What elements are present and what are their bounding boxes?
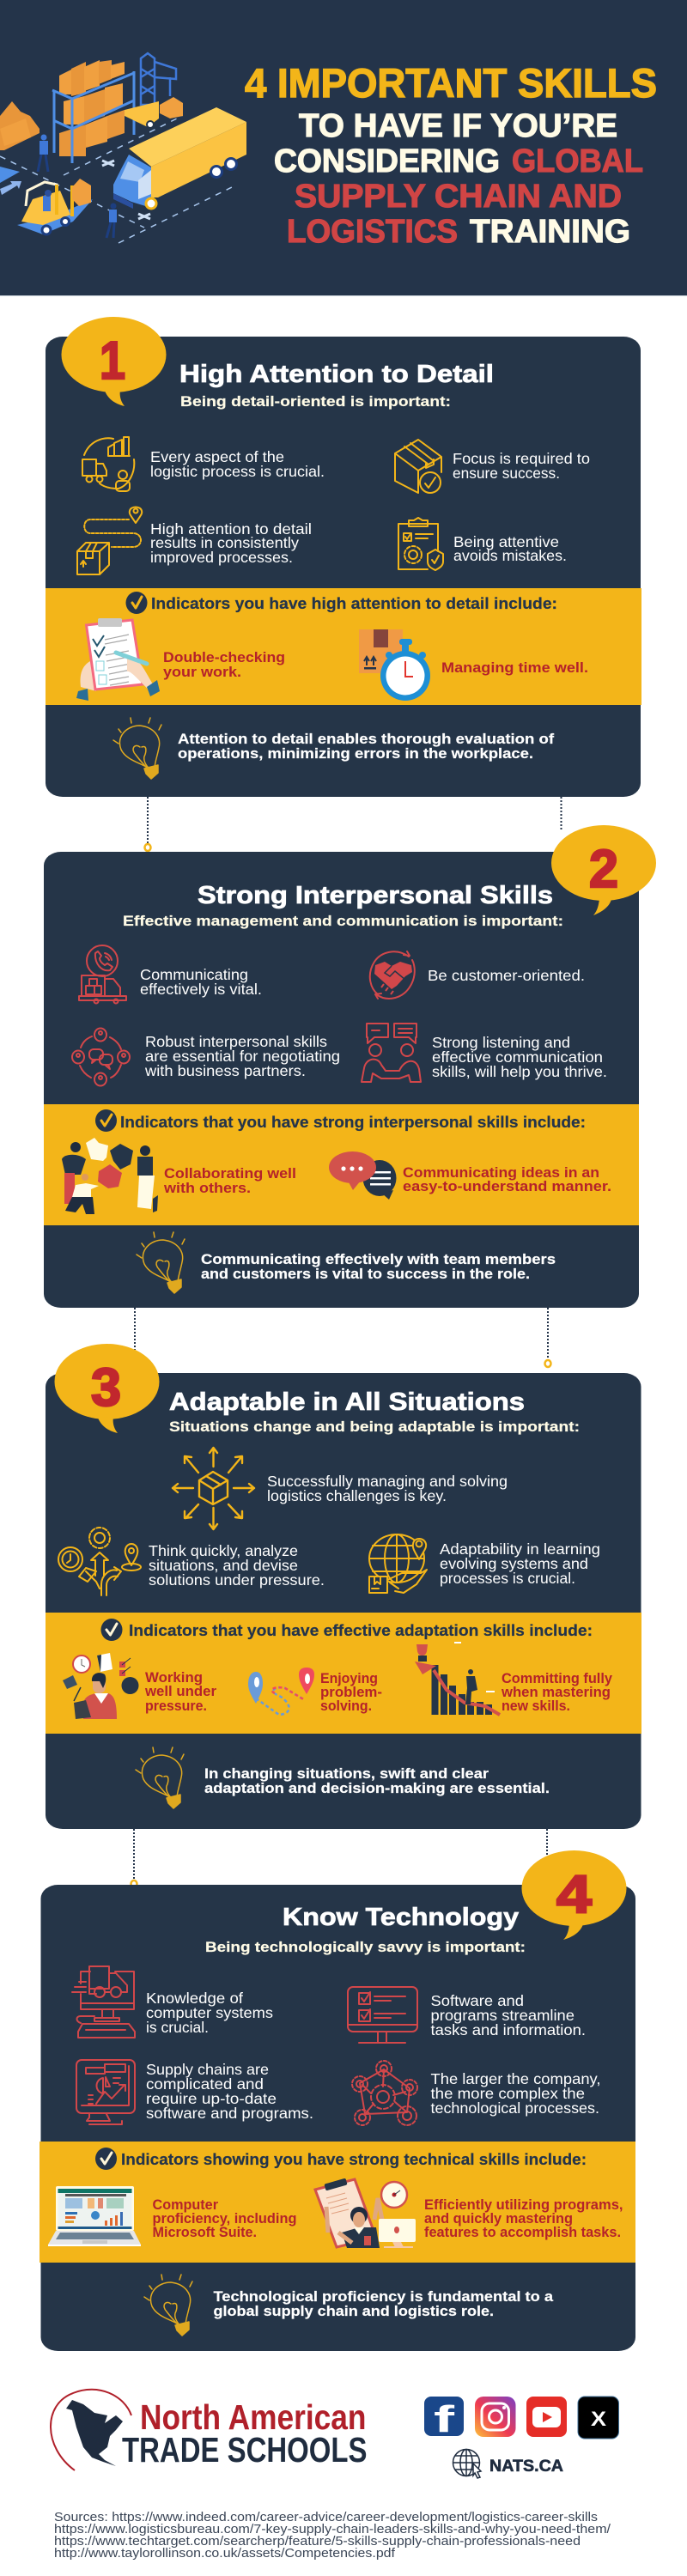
text: communicating xyxy=(140,966,262,998)
title xyxy=(245,60,657,250)
icon: phone and truck xyxy=(79,945,126,1003)
sources: Sources: https://www.indeed.com/career-advice/career-development/logistics-career-skills xyxy=(54,2511,598,2524)
illustration: team with puzzle pieces xyxy=(62,1138,158,1214)
text: high attention: High attention to detail xyxy=(150,520,312,538)
text: double checking: Double-checking xyxy=(163,649,285,665)
title: LOGISTICS xyxy=(287,214,458,250)
text: every aspect xyxy=(150,448,325,480)
text: collaborating: with others. xyxy=(163,1180,251,1196)
text: managing time: Managing time well. xyxy=(441,659,588,676)
connector dotted lines 2 to 3 xyxy=(135,1308,551,1367)
truck xyxy=(113,107,246,209)
icon: handshake xyxy=(370,951,415,999)
indicators band 4 xyxy=(40,2142,635,2263)
heading: Adaptable in All Situations xyxy=(169,1388,525,1416)
text: successfully managing: Successfully managing and solving xyxy=(267,1473,508,1490)
text: communicating ideas: easy-to-understand manner. xyxy=(403,1178,611,1194)
left pallet boxes xyxy=(0,101,40,150)
text: working well xyxy=(144,1669,216,1714)
icon: people network xyxy=(72,1029,130,1085)
title: TO HAVE IF YOU’RE xyxy=(299,108,617,144)
text: computer proficiency xyxy=(153,2196,297,2240)
panel: skill 1 high attention to detail xyxy=(46,317,641,797)
text: every aspect: Every aspect of the xyxy=(150,448,284,465)
number bubble 4: 4 xyxy=(556,1865,593,1924)
icon: speech bubbles xyxy=(329,1151,397,1200)
illustration: person working under pressure xyxy=(63,1653,139,1719)
sources: http://www.taylorollinson.co.uk/assets/Competencies.pdf xyxy=(54,2547,396,2561)
sources xyxy=(54,2511,611,2561)
callout text xyxy=(178,732,555,762)
callout text xyxy=(213,2289,554,2319)
text: robust: with business partners. xyxy=(144,1062,306,1079)
text: being attentive xyxy=(453,533,567,564)
callout text: adaptation and decision-making are essential. xyxy=(204,1781,550,1796)
indicators heading: Indicators you have high attention to detail include: xyxy=(151,595,557,612)
text: strong listening xyxy=(432,1034,607,1080)
callout text xyxy=(201,1252,556,1282)
text: working well: Working xyxy=(145,1669,203,1686)
illustration: warehouse and truck xyxy=(0,53,246,243)
header banner xyxy=(0,0,687,296)
illustration: clipboard in hands xyxy=(76,618,160,701)
callout text: and customers is vital to success in the role. xyxy=(201,1267,530,1282)
indicators heading: Indicators that you have effective adaptation skills include: xyxy=(129,1622,593,1639)
icon: check badge xyxy=(125,592,148,614)
icon: youtube xyxy=(526,2397,567,2437)
indicators heading: Indicators showing you have strong technical skills include: xyxy=(121,2151,587,2168)
text: successfully managing: logistics challenges is key. xyxy=(267,1487,447,1504)
text: high attention xyxy=(150,520,312,566)
illustration: stairs and trophy xyxy=(415,1642,500,1715)
number bubble 4 xyxy=(522,1850,627,1940)
text: enjoying: Enjoying xyxy=(320,1670,378,1686)
icon: route with pin and box xyxy=(77,507,142,574)
text: customer oriented: Be customer-oriented. xyxy=(428,967,585,984)
icon: check badge xyxy=(101,1619,122,1641)
panel: skill 3 adaptable xyxy=(46,1344,641,1829)
logo: north american trade schools xyxy=(51,2390,368,2470)
callout text: Technological proficiency is fundamental to a xyxy=(213,2289,554,2305)
number bubble 2: 2 xyxy=(589,840,618,899)
illustration: laptop with spreadsheet xyxy=(48,2186,141,2246)
icon: two people with speech bubbles xyxy=(362,1024,421,1082)
connector dotted lines 3 to 4 xyxy=(131,1829,547,1887)
text: committing: Committing fully xyxy=(502,1670,613,1686)
number bubble 3: 3 xyxy=(91,1358,121,1418)
front forklift xyxy=(17,179,93,234)
text: software: tasks and information. xyxy=(431,2021,586,2038)
illustration: map pins route xyxy=(248,1668,314,1715)
text: knowledge: Knowledge of xyxy=(146,1990,243,2007)
shelving boxes xyxy=(52,60,134,163)
panel: skill 4 know technology xyxy=(40,1850,635,2351)
logo: north american trade schools: TRADE SCHOOLS xyxy=(122,2430,368,2470)
icon: logistics process cycle xyxy=(82,437,134,491)
number bubble 2 xyxy=(551,825,656,915)
icon: network of gears xyxy=(352,2061,417,2125)
text: focus: ensure success. xyxy=(453,465,560,482)
text: enjoying xyxy=(320,1670,382,1714)
sources: https://www.logisticsbureau.com/7-key-supply-chain-leaders-skills-and-why-you-need-them/ xyxy=(54,2523,611,2537)
text: think quickly xyxy=(149,1542,325,1589)
icon: monitor with charts xyxy=(76,2060,135,2124)
subheading: Being technologically savvy is important: xyxy=(205,1939,526,1955)
icon: x: X xyxy=(591,2408,606,2431)
text: robust: are essential for negotiating xyxy=(145,1048,340,1065)
text: supply chains: Supply chains are xyxy=(146,2061,269,2078)
icon: facebook: f xyxy=(434,2398,455,2440)
title: TRAINING xyxy=(470,214,630,250)
callout text: operations, minimizing errors in the workplace. xyxy=(178,746,533,762)
title: GLOBAL xyxy=(512,143,643,179)
icon: check badge xyxy=(95,1109,117,1132)
callout text xyxy=(204,1766,550,1796)
text: successfully managing xyxy=(267,1473,508,1504)
icon: box with check xyxy=(395,440,441,493)
icon: instagram xyxy=(475,2397,515,2437)
yellow forklift rear xyxy=(125,97,183,128)
text: high attention: improved processes. xyxy=(150,549,293,566)
callout text: Attention to detail enables thorough evaluation of xyxy=(178,732,555,747)
text: being attentive: Being attentive xyxy=(453,533,559,550)
title: CONSIDERING xyxy=(274,143,500,179)
subheading: Effective management and communication is important: xyxy=(123,913,563,929)
text: strong listening: skills, will help you thrive. xyxy=(432,1063,607,1080)
text: collaborating: Collaborating well xyxy=(164,1165,296,1182)
text: every aspect: logistic process is crucial. xyxy=(150,463,325,480)
text: communicating: Communicating xyxy=(140,966,248,983)
icon: check badge xyxy=(95,2148,117,2170)
illustration: box and stopwatch xyxy=(359,629,430,701)
text: efficiently utilizing xyxy=(424,2196,623,2240)
crane xyxy=(141,53,176,105)
icon: x xyxy=(578,2397,618,2439)
subheading: Situations change and being adaptable is important: xyxy=(169,1419,580,1435)
text: working well: well under xyxy=(144,1683,216,1699)
text: think quickly: Think quickly, analyze xyxy=(149,1542,298,1559)
text: larger company: technological processes. xyxy=(431,2099,599,2117)
icon: lightbulb xyxy=(113,718,161,779)
text: communicating: effectively is vital. xyxy=(140,981,262,998)
text: software: programs streamline xyxy=(431,2007,575,2024)
text: think quickly: situations, and devise xyxy=(149,1557,298,1574)
text: knowledge xyxy=(146,1990,273,2036)
text: committing xyxy=(501,1670,613,1714)
indicators band 2 xyxy=(44,1104,639,1225)
text: enjoying: problem- xyxy=(320,1684,382,1700)
icon: facebook xyxy=(424,2397,464,2440)
text: strong listening: Strong listening and xyxy=(432,1034,570,1051)
text: collaborating xyxy=(163,1165,296,1196)
title: SUPPLY CHAIN AND xyxy=(295,179,622,215)
illustration: woman with clipboard and monitor xyxy=(315,2178,416,2248)
heading: Strong Interpersonal Skills xyxy=(198,882,553,909)
subheading: Being detail-oriented is important: xyxy=(180,393,451,410)
website link: nats.ca xyxy=(453,2449,563,2478)
sources: https://www.techtarget.com/searcherp/feature/5-skills-supply-chain-professionals-need xyxy=(54,2535,581,2549)
text: efficiently utilizing: features to accomplish tasks. xyxy=(424,2224,621,2240)
icon: globe with pin, hand and box xyxy=(369,1534,427,1593)
text: efficiently utilizing: and quickly mastering xyxy=(424,2210,573,2227)
text: communicating ideas: Communicating ideas in an xyxy=(403,1164,599,1181)
icon: computer with truck xyxy=(72,1966,135,2038)
indicators band 3 xyxy=(46,1613,641,1734)
text: larger company xyxy=(431,2070,601,2117)
text: computer proficiency: Computer xyxy=(153,2196,218,2213)
text: being attentive: avoids mistakes. xyxy=(453,547,567,564)
icon: monitor checklist xyxy=(348,1987,417,2043)
number bubble 3 xyxy=(55,1344,160,1433)
icon: lightbulb xyxy=(144,2275,192,2336)
text: computer proficiency: proficiency, including xyxy=(153,2210,297,2227)
text: think quickly: solutions under pressure. xyxy=(149,1571,325,1589)
text: larger company: the more complex the xyxy=(431,2085,585,2102)
heading: Know Technology xyxy=(283,1904,519,1931)
text: knowledge: computer systems xyxy=(146,2004,273,2021)
number bubble 1: 1 xyxy=(100,331,125,391)
indicators heading: Indicators that you have strong interpersonal skills include: xyxy=(120,1114,586,1131)
text: adaptability: evolving systems and xyxy=(440,1555,588,1572)
text: software xyxy=(431,1992,586,2038)
text: communicating ideas xyxy=(403,1164,611,1194)
icon: clipboard gear shield xyxy=(398,518,443,570)
text: knowledge: is crucial. xyxy=(146,2019,209,2036)
callout text: Communicating effectively with team members xyxy=(201,1252,556,1267)
text: efficiently utilizing: Efficiently utilizing programs, xyxy=(424,2196,623,2213)
text: robust: Robust interpersonal skills xyxy=(145,1033,327,1050)
panel: skill 2 interpersonal skills xyxy=(44,825,656,1308)
text: committing: new skills. xyxy=(502,1698,570,1714)
text: computer proficiency: Microsoft Suite. xyxy=(153,2224,257,2240)
website link: nats.ca: NATS.CA xyxy=(489,2458,563,2476)
number bubble 1 xyxy=(62,317,167,406)
callout text: In changing situations, swift and clear xyxy=(204,1766,489,1782)
text: supply chains xyxy=(146,2061,313,2122)
logo: north american trade schools: North American xyxy=(140,2397,366,2437)
text: committing: when mastering xyxy=(501,1684,611,1700)
text: supply chains: complicated and xyxy=(146,2075,264,2093)
blue arrow and floor marks xyxy=(0,161,150,219)
text: robust xyxy=(144,1033,340,1079)
icon: lightbulb xyxy=(136,1747,184,1808)
text: adaptability: Adaptability in learning xyxy=(440,1540,600,1558)
text: double checking xyxy=(163,649,285,680)
text: enjoying: solving. xyxy=(320,1698,372,1714)
icon: lightbulb xyxy=(137,1232,185,1293)
text: high attention: results in consistently xyxy=(150,534,299,551)
text: strong listening: effective communication xyxy=(432,1048,603,1066)
text: supply chains: require up-to-date xyxy=(146,2090,277,2107)
text: focus xyxy=(453,450,590,482)
icon: decision arrows gear clock pin xyxy=(58,1528,141,1595)
text: supply chains: software and programs. xyxy=(146,2105,313,2122)
text: adaptability xyxy=(440,1540,600,1587)
callout text: global supply chain and logistics role. xyxy=(213,2304,494,2319)
icon: cube with arrows xyxy=(173,1448,254,1529)
workers xyxy=(38,134,117,238)
text: larger company: The larger the company, xyxy=(431,2070,601,2087)
text: software: Software and xyxy=(431,1992,524,2009)
heading: High Attention to Detail xyxy=(179,361,494,388)
text: focus: Focus is required to xyxy=(453,450,590,467)
text: adaptability: processes is crucial. xyxy=(440,1570,575,1587)
connector dotted lines 1 to 2 xyxy=(144,797,562,851)
text: working well: pressure. xyxy=(145,1698,207,1714)
title: 4 IMPORTANT SKILLS xyxy=(245,60,657,106)
indicators band 1 xyxy=(46,588,641,705)
text: double checking: your work. xyxy=(163,664,241,680)
